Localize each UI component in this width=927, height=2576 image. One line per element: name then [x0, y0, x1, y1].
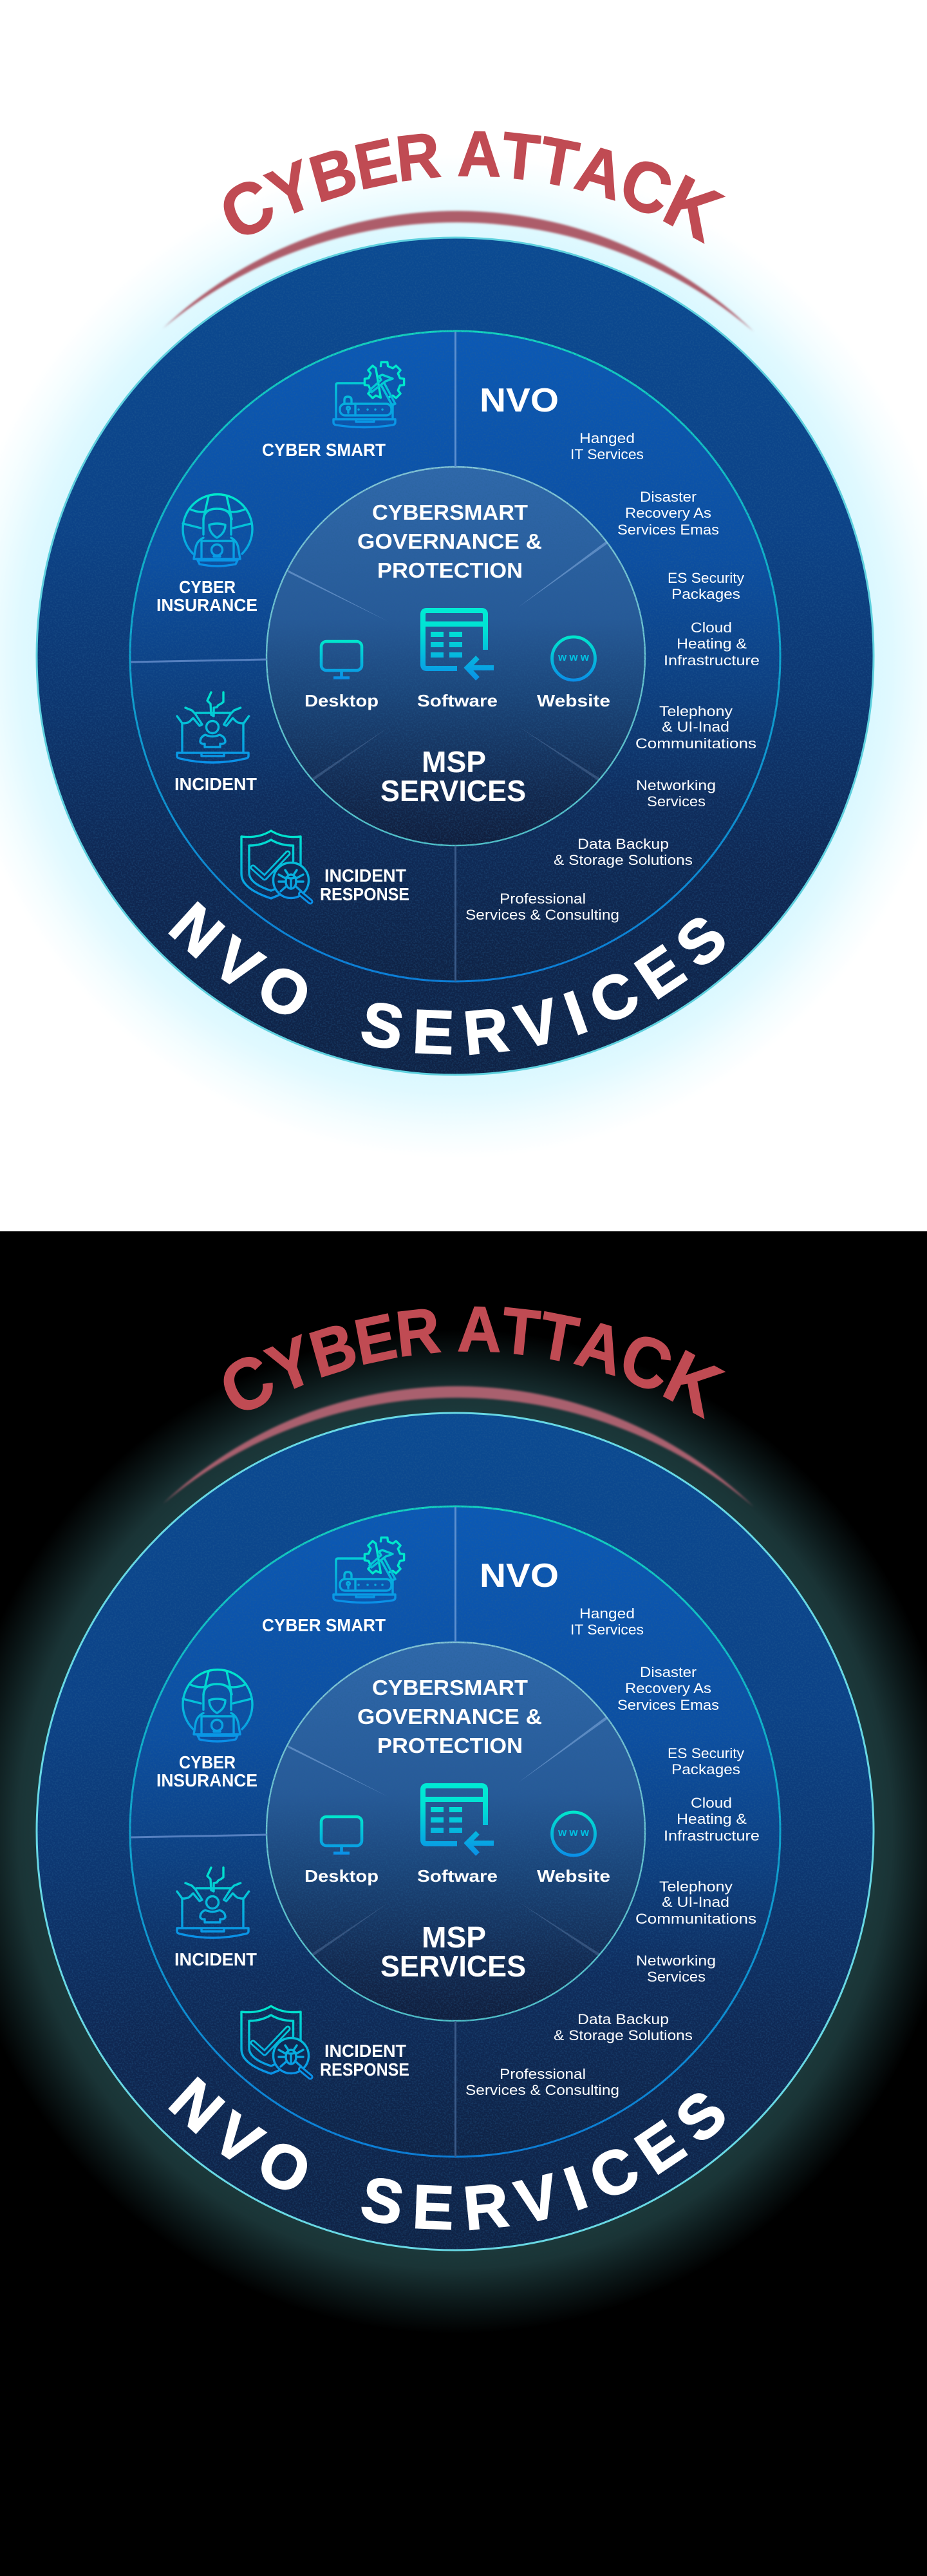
middle ring: [130, 331, 780, 981]
service list: Communitations: [635, 735, 756, 752]
label: cyber insurance: INSURANCE: [156, 1770, 258, 1790]
icon: cyber smart laptop with gear: [333, 362, 404, 428]
heading: msp services: [380, 745, 526, 808]
outer ring: [37, 238, 874, 1075]
label: incident: INCIDENT: [174, 774, 257, 794]
label: software: Software: [417, 1866, 498, 1886]
service list: & Storage Solutions: [554, 852, 693, 868]
label: cyber insurance: INSURANCE: [156, 595, 258, 615]
panel: dark version of the diagram: [0, 1293, 927, 2334]
label: incident response: INCIDENT: [324, 2041, 406, 2061]
heading: cyber attack curved title: CYBER ATTACK: [224, 131, 726, 244]
service list: Data Backup: [577, 836, 669, 852]
service list: Packages: [671, 586, 740, 602]
panel: light version of the diagram: [0, 117, 927, 1159]
heading: msp services: SERVICES: [380, 1949, 526, 1983]
icon: hacker with globe: [183, 1670, 252, 1741]
icon: incident laptop under attack: [177, 1868, 249, 1938]
service list: [465, 1605, 760, 2098]
service list: Infrastructure: [664, 1828, 760, 1844]
outer ring: [37, 1413, 874, 2250]
service list: Professional: [500, 2066, 586, 2082]
service list: Services Emas: [617, 522, 719, 538]
label: incident response: [320, 2041, 409, 2079]
service list: Recovery As: [625, 1680, 711, 1696]
label: cyber insurance: CYBER: [179, 1752, 236, 1772]
icon: desktop: [321, 1817, 362, 1853]
icon: website globe: [552, 637, 595, 680]
glow around disc: [0, 1329, 927, 2334]
service list: Cloud: [691, 1795, 732, 1811]
inner circle: [267, 467, 645, 846]
label: incident response: INCIDENT: [324, 866, 406, 886]
service list: Hanged: [579, 1605, 635, 1622]
service list: Recovery As: [625, 505, 711, 521]
icon: website globe: [552, 1812, 595, 1855]
service list: Professional: [500, 891, 586, 907]
label: software: Software: [417, 691, 498, 710]
service list: Services Emas: [617, 1697, 719, 1713]
glow around disc: [0, 154, 927, 1159]
label: incident: INCIDENT: [174, 1949, 257, 1969]
label: incident response: RESPONSE: [320, 884, 409, 904]
label: cyber insurance: [156, 1752, 258, 1790]
icon: shield with magnifier and bug: [241, 831, 310, 902]
label: website: Website: [537, 691, 610, 710]
service list: Heating &: [677, 636, 747, 652]
panel background: black: [0, 1231, 927, 2576]
label: website: Website: [537, 1866, 610, 1886]
service list: IT Services: [570, 1622, 644, 1638]
label: desktop: Desktop: [304, 691, 379, 710]
heading: msp services: [380, 1920, 526, 1983]
heading: nvo services curved title: NVO SERVICES: [168, 901, 725, 1055]
icon: incident laptop under attack: [177, 692, 249, 762]
heading: cybersmart governance and protection: GOVERNANCE &: [357, 529, 542, 553]
service list: Services & Consulting: [465, 2082, 619, 2098]
service list: & UI-Inad: [662, 1894, 729, 1910]
service list: & Storage Solutions: [554, 2027, 693, 2043]
icon: software window with arrow: [423, 611, 494, 679]
heading: cybersmart governance and protection: CYBERSMART: [372, 500, 528, 524]
label: cyber insurance: CYBER: [179, 577, 236, 597]
service list: Telephony: [659, 703, 733, 719]
heading: nvo: NVO: [480, 1557, 559, 1595]
inner circle spokes: [288, 541, 608, 781]
icon: cyber smart laptop with gear: [333, 1537, 404, 1602]
service list: Disaster: [640, 489, 697, 505]
heading: cybersmart governance and protection: GOVERNANCE &: [357, 1705, 542, 1728]
grain texture: [38, 239, 872, 1074]
middle ring dividers: [131, 1507, 456, 2157]
service list: Hanged: [579, 430, 635, 446]
heading: msp services: MSP: [422, 745, 486, 779]
service list: Communitations: [635, 1911, 756, 1927]
middle ring dividers: [131, 332, 456, 981]
service list: Cloud: [691, 620, 732, 636]
service list: ES Security: [668, 1745, 744, 1761]
service list: ES Security: [668, 570, 744, 586]
service list: Networking: [636, 1953, 716, 1969]
label: desktop: Desktop: [304, 1866, 379, 1886]
red shield arc: [163, 1387, 754, 1507]
label: cyber smart: CYBER SMART: [262, 440, 386, 460]
grain texture: [38, 1414, 872, 2249]
service list: Data Backup: [577, 2011, 669, 2027]
icon: desktop: [321, 641, 362, 677]
service list: Heating &: [677, 1811, 747, 1827]
label: cyber insurance: [156, 577, 258, 615]
heading: nvo: NVO: [480, 382, 559, 419]
service list: [465, 430, 760, 923]
heading: cybersmart governance and protection: [357, 500, 542, 582]
service list: IT Services: [570, 446, 644, 462]
icon: shield with magnifier and bug: [241, 2006, 310, 2077]
heading: msp services: SERVICES: [380, 774, 526, 808]
panel background: white: [0, 0, 927, 1231]
heading: msp services: MSP: [422, 1920, 486, 1954]
service list: Packages: [671, 1761, 740, 1777]
red shield arc: [163, 211, 754, 332]
heading: cybersmart governance and protection: CYBERSMART: [372, 1676, 528, 1700]
service list: Services & Consulting: [465, 907, 619, 923]
heading: cybersmart governance and protection: PROTECTION: [377, 1734, 523, 1757]
heading: nvo services curved title: NVO SERVICES: [168, 2076, 725, 2231]
label: incident response: [320, 866, 409, 904]
heading: cyber attack curved title: CYBER ATTACK: [224, 1306, 726, 1419]
middle ring: [130, 1506, 780, 2157]
label: incident response: RESPONSE: [320, 2060, 409, 2079]
service list: Networking: [636, 777, 716, 793]
inner circle spokes: [288, 1716, 608, 1956]
heading: cybersmart governance and protection: PROTECTION: [377, 558, 523, 582]
service list: Infrastructure: [664, 652, 760, 668]
service list: Disaster: [640, 1664, 697, 1680]
label: cyber smart: CYBER SMART: [262, 1615, 386, 1635]
service list: Telephony: [659, 1879, 733, 1895]
icon: software window with arrow: [423, 1786, 494, 1854]
inner circle: [267, 1642, 645, 2021]
heading: cybersmart governance and protection: [357, 1676, 542, 1757]
service list: Services: [647, 1969, 706, 1985]
icon: website globe: www: [557, 651, 590, 663]
icon: website globe: www: [557, 1826, 590, 1839]
service list: & UI-Inad: [662, 719, 729, 735]
icon: hacker with globe: [183, 495, 252, 566]
service list: Services: [647, 793, 706, 810]
